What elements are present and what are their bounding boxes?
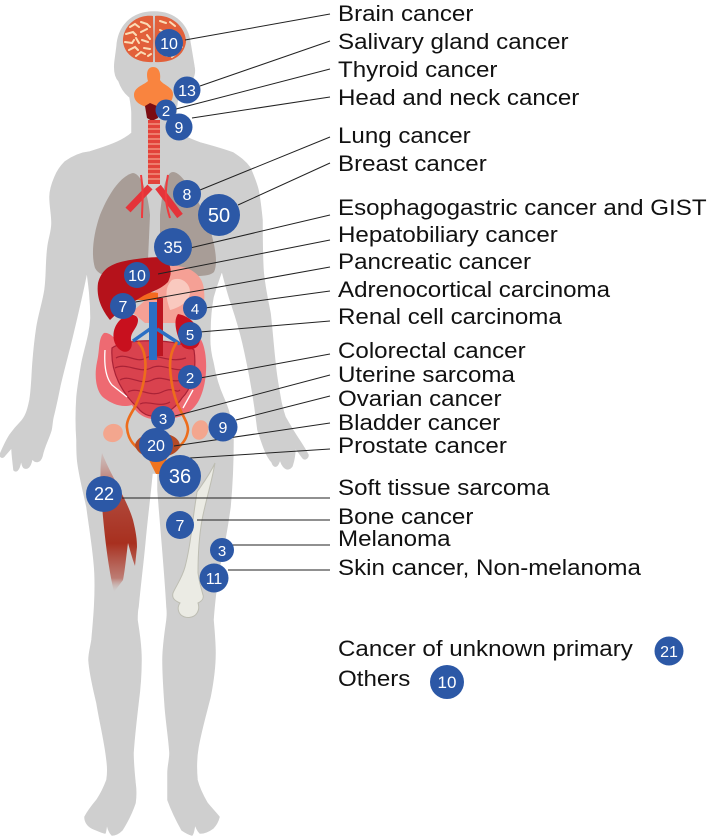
organ: salivary gland <box>134 67 173 108</box>
cancer type labels: Breast cancer <box>338 151 487 176</box>
organ: trachea <box>128 120 180 218</box>
count badges <box>86 29 684 699</box>
cancer type labels: Prostate cancer <box>338 433 507 458</box>
cancer type labels: Soft tissue sarcoma <box>338 475 550 500</box>
count badges: 10 <box>128 268 146 285</box>
cancer type labels: Lung cancer <box>338 123 471 148</box>
cancer type labels: Uterine sarcoma <box>338 362 515 387</box>
cancer type labels: Adrenocortical carcinoma <box>338 277 610 302</box>
organ: thyroid <box>145 103 158 121</box>
cancer type labels: Renal cell carcinoma <box>338 304 562 329</box>
count badges: 10 <box>160 36 178 53</box>
cancer type labels: Esophagogastric cancer and GIST <box>338 195 707 220</box>
count badges: 13 <box>178 83 196 100</box>
leader lines <box>122 14 330 570</box>
organ: large intestine <box>96 333 206 419</box>
count badges: 7 <box>176 518 185 535</box>
organ: stomach and pancreas <box>132 266 204 323</box>
count badges: 50 <box>208 205 230 227</box>
count badges: 10 <box>438 673 456 692</box>
lungs <box>93 172 216 276</box>
organ: brain <box>123 16 186 62</box>
organ: kidneys and adrenal <box>113 314 200 352</box>
organ: small intestine <box>112 341 195 416</box>
cancer type labels: Bone cancer <box>338 504 474 529</box>
organ: ovaries <box>101 418 211 445</box>
count badges: 2 <box>186 370 194 387</box>
count badges: 2 <box>162 103 170 120</box>
count badges: 22 <box>94 484 114 504</box>
cancer type labels: Hepatobiliary cancer <box>338 222 558 247</box>
cancer type labels: Head and neck cancer <box>338 85 580 110</box>
cancer type labels: Cancer of unknown primary <box>338 636 633 661</box>
count badges: 36 <box>169 466 191 488</box>
organ: ureters <box>127 342 188 450</box>
count badges: 11 <box>206 571 222 588</box>
cancer type labels: Salivary gland cancer <box>338 29 569 54</box>
cancer type labels: Brain cancer <box>338 1 474 26</box>
organ: muscle <box>100 453 137 592</box>
count badges: 8 <box>183 187 192 204</box>
cancer type labels: Thyroid cancer <box>338 57 498 82</box>
cancer type labels: Colorectal cancer <box>338 338 526 363</box>
intestine highlights <box>105 350 193 408</box>
organ: aorta and vena cava <box>133 298 180 360</box>
organ: liver <box>98 257 171 320</box>
count badges: 3 <box>159 411 167 428</box>
cancer type labels: Pancreatic cancer <box>338 249 531 274</box>
count badges: 7 <box>119 299 128 316</box>
organ: bladder and prostate <box>135 433 180 474</box>
count badges: 9 <box>219 420 228 437</box>
cancer type labels: Others <box>338 666 410 691</box>
count badges: 4 <box>191 301 199 318</box>
cancer type labels <box>338 1 707 691</box>
count badges: 21 <box>660 644 678 661</box>
count badges: 20 <box>147 438 165 455</box>
count badges: 5 <box>186 327 194 344</box>
organ: femur bone <box>173 463 215 617</box>
count badges: 35 <box>164 238 182 257</box>
cancer type labels: Skin cancer, Non-melanoma <box>338 555 641 580</box>
cancer type labels: Melanoma <box>338 526 451 551</box>
count badges: 9 <box>175 120 184 137</box>
body silhouette <box>0 12 308 835</box>
cancer type labels: Ovarian cancer <box>338 386 502 411</box>
count badges: 3 <box>218 543 226 560</box>
cancer type labels: Bladder cancer <box>338 410 500 435</box>
